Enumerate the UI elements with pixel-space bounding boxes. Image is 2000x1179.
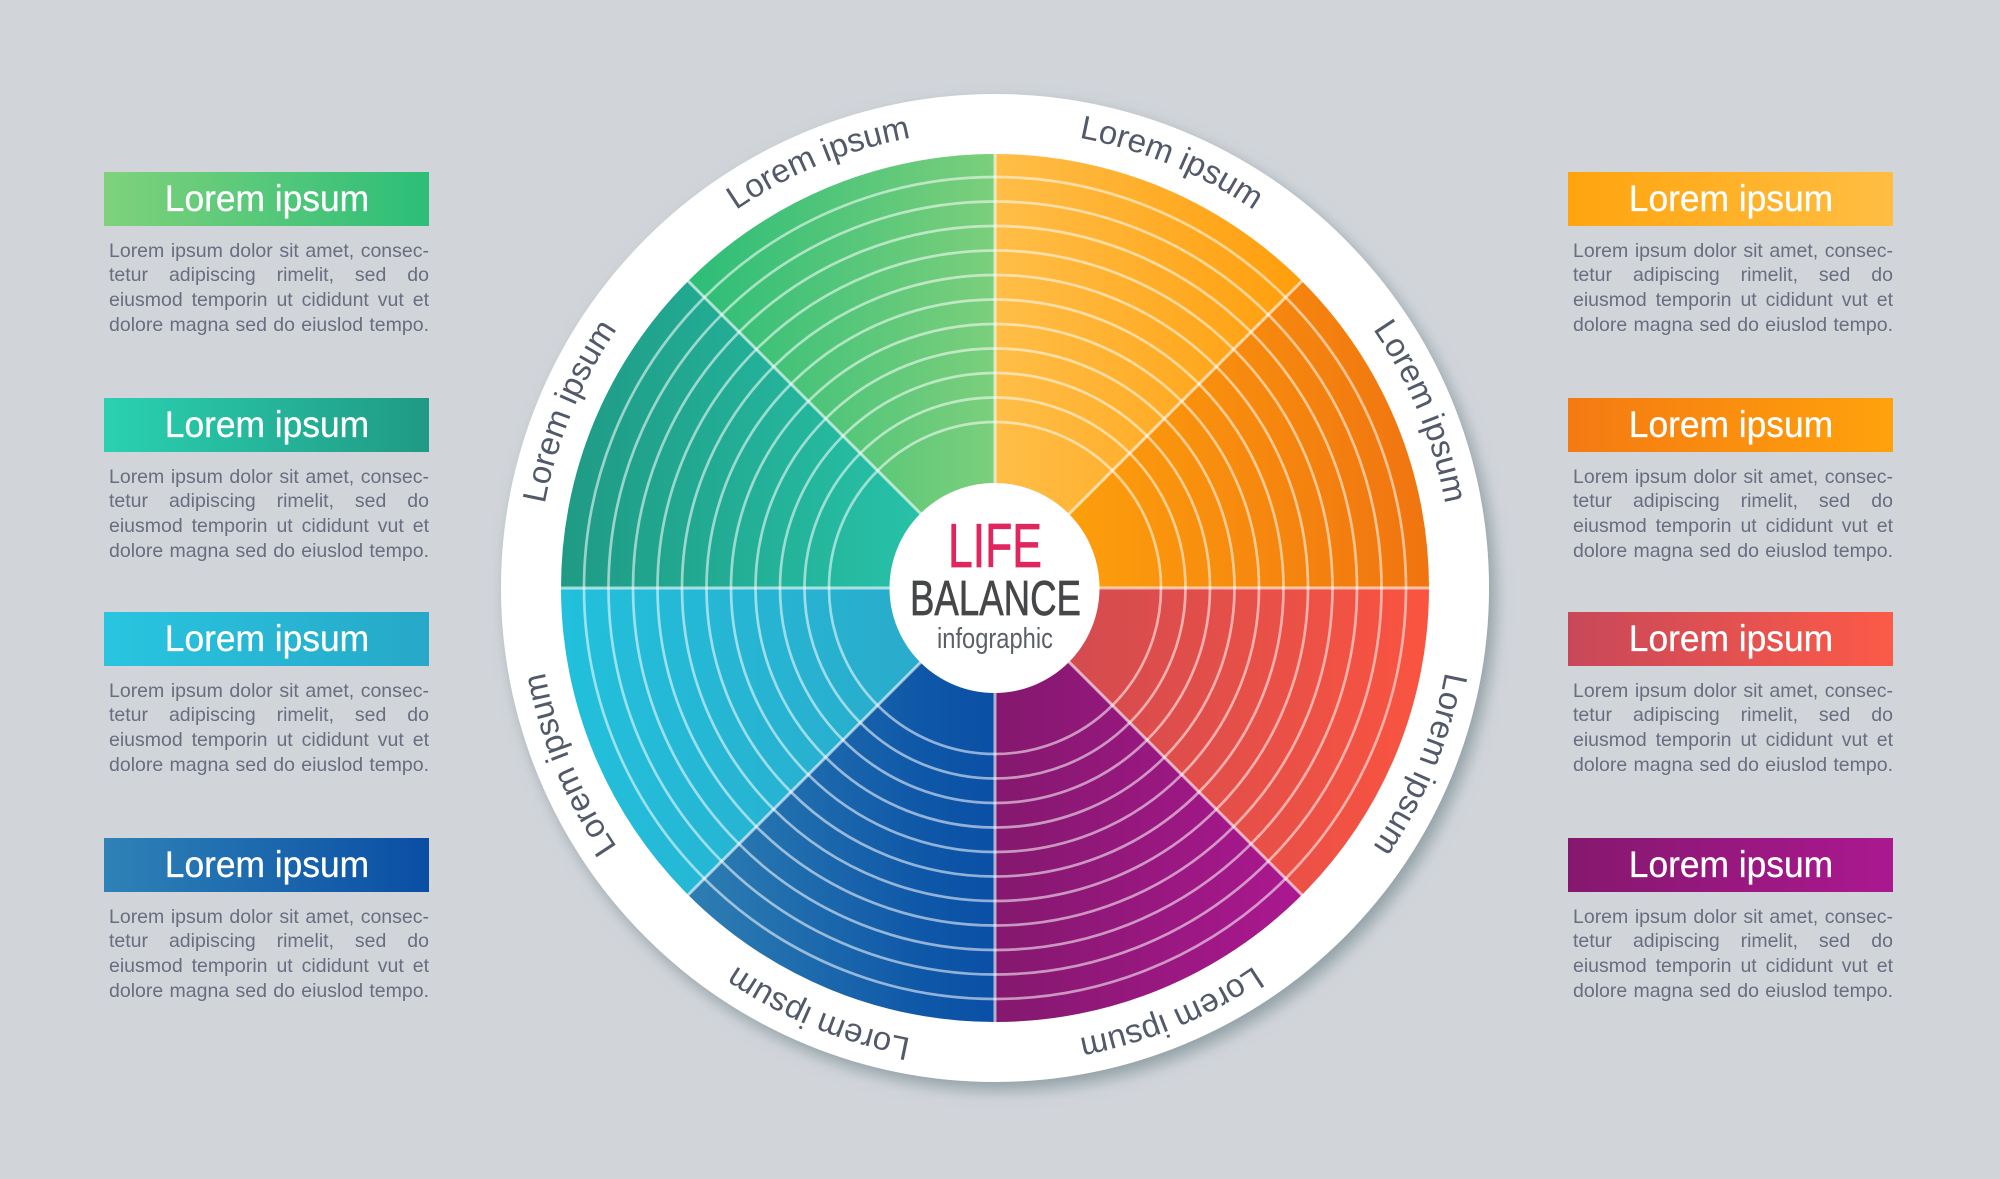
heading: Lorem ipsum <box>1628 404 1833 445</box>
label: green: Lorem ipsum <box>726 122 909 209</box>
text block <box>1573 466 1893 562</box>
label: purple: Lorem ipsum <box>1081 967 1264 1054</box>
title: balance: BALANCE <box>910 572 1081 626</box>
text block: dolore magna sed do eiuslod tempo. <box>109 314 429 336</box>
text block: Lorem ipsum dolor sit amet, consec- <box>1573 466 1893 488</box>
panel: left 3 cyan <box>104 612 429 776</box>
concentric rings <box>584 177 1406 999</box>
spokes <box>561 154 1429 1022</box>
text block: dolore magna sed do eiuslod tempo. <box>109 540 429 562</box>
text block: tetur adipiscing rimelit, sed do <box>109 490 429 512</box>
heading <box>104 612 429 666</box>
heading: Lorem ipsum <box>1628 618 1833 659</box>
label: red: Lorem ipsum <box>1374 674 1467 854</box>
text block <box>109 240 429 336</box>
segment labels on the rim <box>523 116 1467 1060</box>
text block: Lorem ipsum dolor sit amet, consec- <box>109 906 429 928</box>
text block: eiusmod temporin ut cididunt vut et <box>109 515 429 537</box>
heading <box>1568 838 1893 892</box>
segment: orange <box>995 281 1429 588</box>
heading: Lorem ipsum <box>164 178 369 219</box>
text block: tetur adipiscing rimelit, sed do <box>1573 704 1893 726</box>
text block: eiusmod temporin ut cididunt vut et <box>109 729 429 751</box>
panel: right 1 yellow orange <box>1568 172 1893 336</box>
panel: left 1 green <box>104 172 429 336</box>
segment: blue <box>688 588 995 1022</box>
label: orange: Lorem ipsum <box>1374 318 1462 502</box>
label: yellow orange: Lorem ipsum <box>1082 116 1260 209</box>
text block <box>1573 906 1893 1002</box>
text block: eiusmod temporin ut cididunt vut et <box>109 955 429 977</box>
panel: right 3 red <box>1568 612 1893 776</box>
segment: red <box>995 588 1429 895</box>
heading <box>104 172 429 226</box>
panel: left 4 blue <box>104 838 429 1002</box>
text block: dolore magna sed do eiuslod tempo. <box>1573 314 1893 336</box>
text block: Lorem ipsum dolor sit amet, consec- <box>1573 680 1893 702</box>
text block: Lorem ipsum dolor sit amet, consec- <box>1573 906 1893 928</box>
subtitle: infographic: infographic <box>937 623 1053 655</box>
text block: dolore magna sed do eiuslod tempo. <box>109 754 429 776</box>
text block: tetur adipiscing rimelit, sed do <box>109 930 429 952</box>
heading <box>1568 612 1893 666</box>
text block: tetur adipiscing rimelit, sed do <box>1573 264 1893 286</box>
heading <box>104 838 429 892</box>
heading: Lorem ipsum <box>1628 178 1833 219</box>
text block: dolore magna sed do eiuslod tempo. <box>109 980 429 1002</box>
text block: Lorem ipsum dolor sit amet, consec- <box>1573 240 1893 262</box>
white outer disc <box>501 94 1489 1082</box>
text block: eiusmod temporin ut cididunt vut et <box>109 289 429 311</box>
text block: tetur adipiscing rimelit, sed do <box>109 264 429 286</box>
heading: Lorem ipsum <box>1628 844 1833 885</box>
segment: purple <box>995 588 1302 1022</box>
text block <box>109 906 429 1002</box>
text block <box>1573 240 1893 336</box>
segment: yellow orange <box>995 154 1302 588</box>
text block: tetur adipiscing rimelit, sed do <box>109 704 429 726</box>
text block <box>1573 680 1893 776</box>
heading: Lorem ipsum <box>164 844 369 885</box>
heading <box>1568 172 1893 226</box>
panel: right 2 orange <box>1568 398 1893 562</box>
text block: tetur adipiscing rimelit, sed do <box>1573 930 1893 952</box>
label: teal: Lorem ipsum <box>523 322 616 502</box>
center hub with title <box>890 483 1100 693</box>
title: life: LIFE <box>948 512 1042 581</box>
text block: eiusmod temporin ut cididunt vut et <box>1573 289 1893 311</box>
panel: left 2 teal <box>104 398 429 562</box>
text block: eiusmod temporin ut cididunt vut et <box>1573 955 1893 977</box>
heading: Lorem ipsum <box>164 404 369 445</box>
text block: Lorem ipsum dolor sit amet, consec- <box>109 466 429 488</box>
heading <box>104 398 429 452</box>
segment: teal <box>561 281 995 588</box>
text block <box>109 680 429 776</box>
text block: Lorem ipsum dolor sit amet, consec- <box>109 240 429 262</box>
text block: tetur adipiscing rimelit, sed do <box>1573 490 1893 512</box>
text block: eiusmod temporin ut cididunt vut et <box>1573 729 1893 751</box>
label: blue: Lorem ipsum <box>730 967 908 1060</box>
heading: Lorem ipsum <box>164 618 369 659</box>
heading <box>1568 398 1893 452</box>
text block: dolore magna sed do eiuslod tempo. <box>1573 980 1893 1002</box>
text block: dolore magna sed do eiuslod tempo. <box>1573 540 1893 562</box>
text block <box>109 466 429 562</box>
text block: eiusmod temporin ut cididunt vut et <box>1573 515 1893 537</box>
text block: Lorem ipsum dolor sit amet, consec- <box>109 680 429 702</box>
label: cyan: Lorem ipsum <box>528 674 616 858</box>
panel: right 4 purple <box>1568 838 1893 1002</box>
segment: cyan <box>561 588 995 895</box>
text block: dolore magna sed do eiuslod tempo. <box>1573 754 1893 776</box>
segment: green <box>688 154 995 588</box>
